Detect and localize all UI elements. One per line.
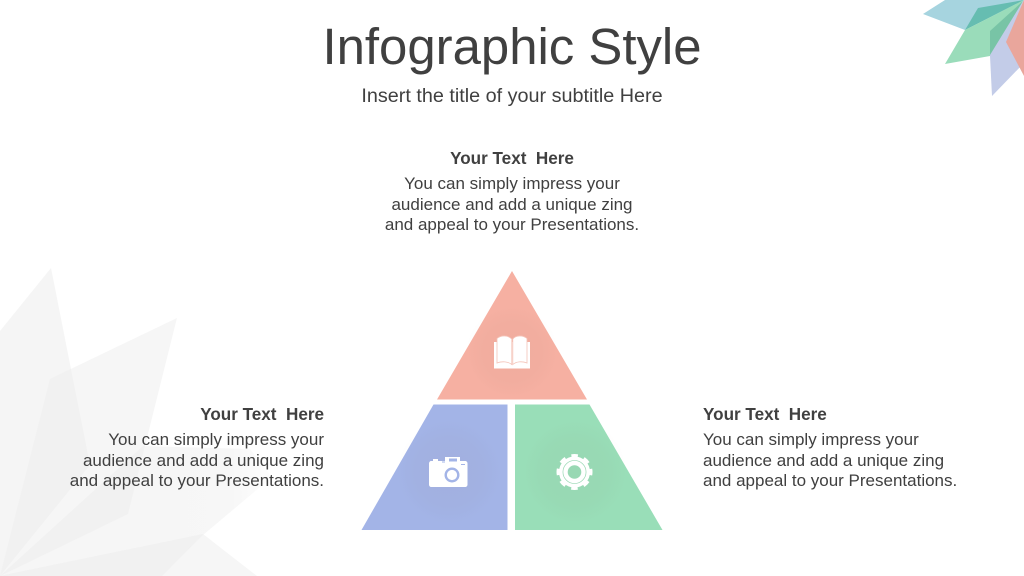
text block: top: You can simply impress your — [404, 174, 620, 193]
icon shadow: right — [523, 420, 627, 524]
pyramid segment: bottom right green — [515, 404, 662, 530]
title: Infographic Style — [322, 18, 702, 75]
icon: gear — [558, 456, 591, 488]
text block: top: Your Text Here — [450, 149, 574, 168]
subtitle: Insert the title of your subtitle Here — [361, 85, 663, 107]
pyramid segment: top red — [437, 271, 587, 400]
icon shadow: top — [466, 306, 558, 398]
text block: right: and appeal to your Presentations. — [703, 471, 957, 490]
text block: left: You can simply impress your — [108, 430, 324, 449]
icon: open book — [494, 336, 530, 368]
text block: top — [385, 149, 639, 234]
icon shadow: left — [397, 420, 501, 524]
icon: camera — [429, 457, 468, 487]
text block: left — [70, 405, 324, 490]
pyramid segment: bottom left blue — [362, 404, 508, 530]
text block: top: and appeal to your Presentations. — [385, 215, 639, 234]
text block: left: Your Text Here — [200, 405, 324, 424]
text block: left: and appeal to your Presentations. — [70, 471, 324, 490]
text block: left: audience and add a unique zing — [83, 450, 324, 470]
text block: right: audience and add a unique zing — [703, 450, 944, 470]
text block: right — [703, 405, 957, 490]
text block: right: Your Text Here — [703, 405, 827, 424]
text block: top: audience and add a unique zing — [391, 194, 633, 214]
text block: right: You can simply impress your — [703, 430, 919, 449]
